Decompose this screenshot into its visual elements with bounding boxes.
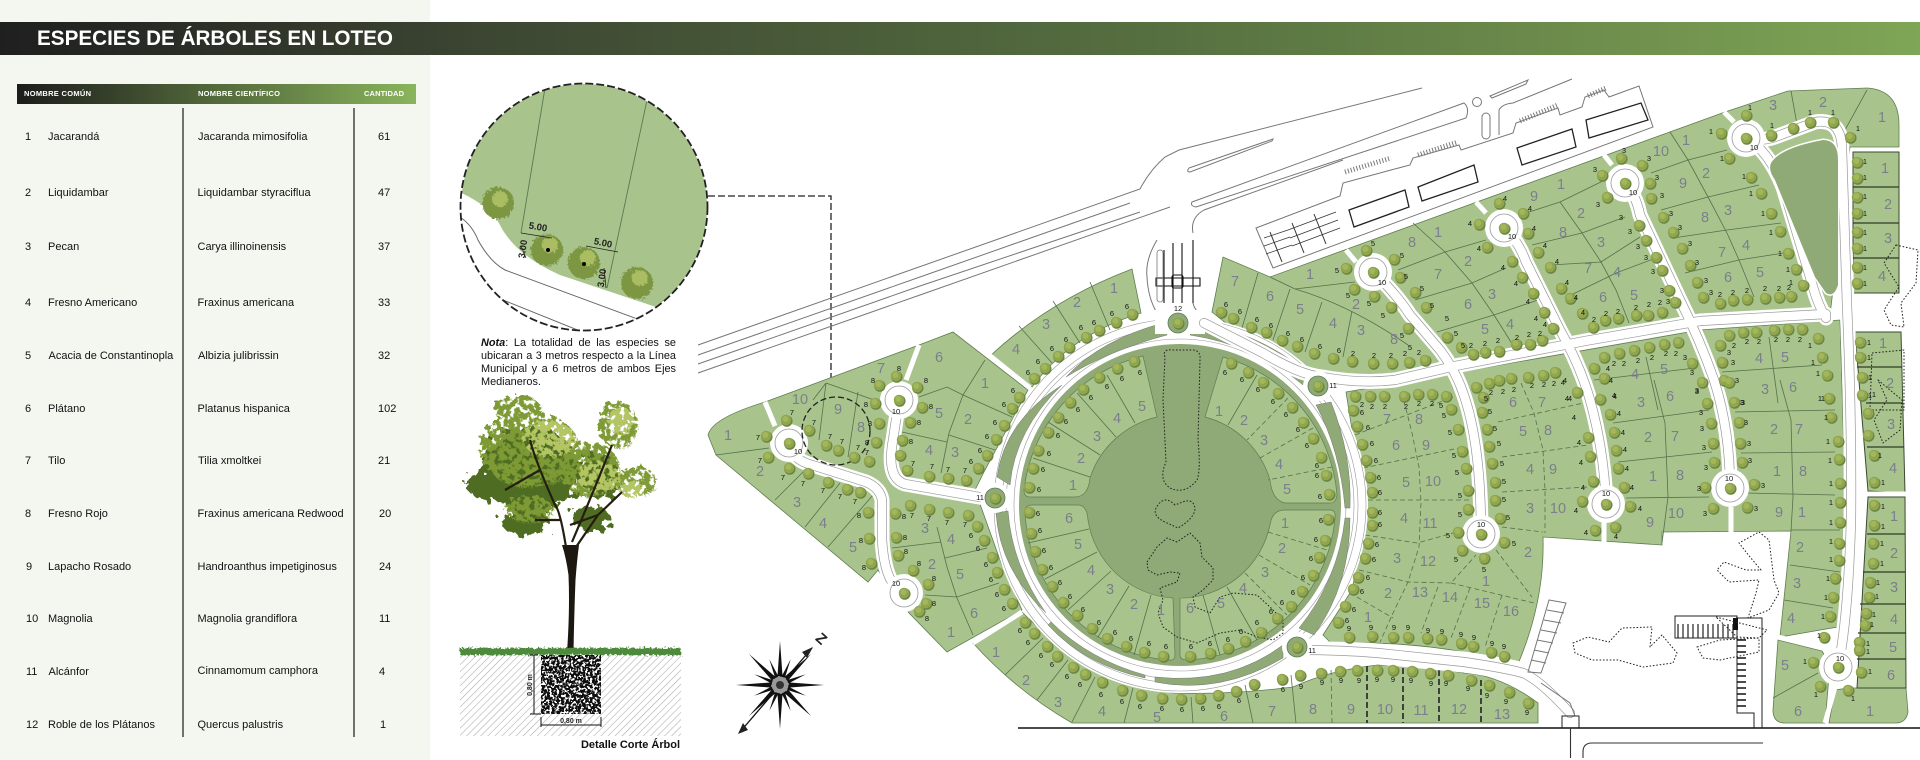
table rows: Fresno Rojo bbox=[48, 508, 108, 520]
table rows: 7 bbox=[25, 455, 31, 467]
table rows: Pecan bbox=[48, 241, 79, 253]
table rows: 9 bbox=[26, 561, 32, 573]
dimensions: 3.00 bbox=[517, 239, 530, 259]
table rows: Albizia julibrissin bbox=[198, 350, 279, 362]
caption: Detalle Corte Árbol bbox=[581, 738, 680, 751]
plan: tree species numbers bbox=[756, 103, 1885, 717]
table rows: 102 bbox=[378, 403, 396, 415]
plan: tree species numbers: 555555555555555555555555555555555 bbox=[1335, 239, 1516, 574]
plan: lot numbers: 43211234512345654321654321 bbox=[1012, 281, 1291, 619]
plan: lot numbers: 15 bbox=[1474, 596, 1490, 612]
plan: lot numbers: 12 bbox=[1451, 702, 1467, 718]
plan: tree species numbers: 111111111111111111111111111111111111111111111111111111111111 bbox=[1709, 103, 1885, 703]
table rows: 8 bbox=[25, 508, 31, 520]
plan: tree species numbers: 10 bbox=[1508, 232, 1516, 241]
plan: tree species numbers: 666666666666666666666666 bbox=[1036, 509, 1323, 651]
plan: tree species numbers: 10 bbox=[1629, 188, 1637, 197]
plan: tree species numbers: 10 bbox=[1378, 278, 1386, 287]
north-west arc lots bbox=[990, 269, 1141, 387]
plan: lot numbers: 786954321123456789 bbox=[1364, 395, 1557, 626]
table rows: 47 bbox=[378, 187, 390, 199]
table header: NOMBRE COMÚN bbox=[24, 89, 91, 98]
plan: tree species numbers: 777777777777777777777 bbox=[756, 408, 967, 529]
plan: lot numbers: 13 bbox=[1412, 585, 1428, 601]
table rows: 11 bbox=[379, 613, 390, 625]
plan: tree species numbers: 10 bbox=[892, 579, 900, 588]
soil section with planting pit: 0,80 m bbox=[560, 718, 582, 725]
south lots bbox=[973, 612, 1538, 723]
lower right lots bbox=[1773, 640, 1830, 723]
species table bbox=[17, 84, 416, 737]
tree canopy outlines bbox=[1147, 350, 1283, 643]
plan: tree species numbers: 10 bbox=[1750, 143, 1758, 152]
ring road lines and median islands bbox=[994, 319, 1366, 691]
table rows: 1 bbox=[380, 719, 386, 731]
dashed detail marker on plan bbox=[802, 397, 870, 465]
pit dimensions bbox=[530, 655, 601, 727]
plan: lot polygons bbox=[708, 88, 1908, 723]
plan: street trees bbox=[765, 114, 1875, 704]
table rows: Jacarandá bbox=[48, 131, 100, 143]
plan: tree species numbers: 10 bbox=[892, 407, 900, 416]
plan: tree species numbers: 10 bbox=[1477, 520, 1485, 529]
roundabouts bbox=[980, 308, 1333, 662]
plan: lot numbers: 16 bbox=[1503, 604, 1519, 620]
plan: tree species numbers: 11 bbox=[976, 493, 984, 502]
table rows: 20 bbox=[379, 508, 391, 520]
tree photo bbox=[466, 396, 657, 652]
entrance gate bbox=[1156, 240, 1200, 303]
plan: lot numbers: 10 bbox=[1425, 474, 1441, 490]
canopy bbox=[466, 428, 622, 535]
table rows: Magnolia grandiflora bbox=[198, 613, 298, 625]
soil section with planting pit: 0,80 m bbox=[527, 674, 534, 696]
table header: NOMBRE CIENTÍFICO bbox=[198, 89, 280, 98]
table rows: Liquidambar styraciflua bbox=[198, 187, 311, 199]
plan: tree species numbers: 12 bbox=[1174, 304, 1182, 313]
plan: lot numbers bbox=[724, 95, 1898, 726]
east strip lots bbox=[1853, 152, 1906, 688]
title bar bbox=[0, 22, 1920, 55]
plan: lot numbers: 12 bbox=[1420, 554, 1436, 570]
plan: lot numbers: 13 bbox=[1494, 707, 1510, 723]
table rows: Fresno Americano bbox=[48, 297, 137, 309]
plan: lot numbers: 14 bbox=[1442, 590, 1458, 606]
plan: lot numbers: 12345987654321324561 bbox=[724, 350, 989, 641]
plan: lot dividers bbox=[716, 90, 1906, 723]
dashed tree canopies south-east and east bbox=[1573, 245, 1918, 667]
table rows: Plátano bbox=[48, 403, 85, 415]
plan: tree species numbers: 333333333333333333333333333333333333333 bbox=[1593, 146, 1765, 518]
plan: lot numbers: 11 bbox=[1422, 516, 1438, 532]
plan: tree species numbers: 444444444444444444444444444444444444 bbox=[1468, 194, 1642, 541]
table rows: Platanus hispanica bbox=[198, 403, 291, 415]
plan: tree species numbers: 66666666666666 bbox=[1345, 408, 1382, 625]
table rows: 2 bbox=[25, 187, 31, 199]
plan: lot numbers: 45362718945362718 bbox=[1631, 350, 1807, 531]
dimensions: 5.00 bbox=[528, 220, 548, 235]
plan: lot numbers: 10 bbox=[792, 392, 808, 408]
plan: tree species numbers: 66666666666666666666666666666666 bbox=[1018, 300, 1341, 714]
table rows: 61 bbox=[378, 131, 390, 143]
plan: lot numbers: 1234123412345616543219 bbox=[1775, 161, 1898, 720]
dashed leader to plan bbox=[708, 196, 831, 397]
table rows: Fraxinus americana Redwood bbox=[198, 508, 344, 520]
table header: CANTIDAD bbox=[364, 89, 405, 98]
middle blocks bbox=[1323, 320, 1849, 664]
icon: compass rose bbox=[736, 630, 830, 734]
plan: tree species numbers: 22222222222222222222222222222222222222222222222 bbox=[1351, 283, 1802, 411]
north letter: Z bbox=[812, 630, 830, 649]
central green circle bbox=[1088, 416, 1270, 598]
table rows: Tilo bbox=[48, 455, 65, 467]
table rows: 5 bbox=[25, 350, 31, 362]
table rows: 33 bbox=[378, 297, 390, 309]
plan: lot numbers: 123456789 bbox=[992, 645, 1355, 726]
table rows: Carya illinoinensis bbox=[198, 241, 287, 253]
table rows: Quercus palustris bbox=[198, 719, 284, 731]
dimensions: 3.00 bbox=[596, 268, 609, 288]
table header bbox=[17, 84, 416, 104]
plan: tree species numbers: 10 bbox=[1836, 654, 1844, 663]
north-east block bbox=[1212, 88, 1899, 380]
plan: tree species numbers: 11 bbox=[1308, 646, 1316, 655]
inner ring lots bbox=[1024, 356, 1337, 660]
table rows: Acacia de Constantinopla bbox=[48, 350, 174, 362]
table rows: Tilia xmoltkei bbox=[198, 455, 261, 467]
plan: lot numbers: 7654312887651234987612345 bbox=[1231, 177, 1638, 348]
plan: lot numbers: 11 bbox=[1413, 703, 1429, 719]
detail circle: tree spacing bbox=[460, 82, 708, 332]
plan: tree species numbers: 10 bbox=[1725, 474, 1733, 483]
table rows: 4 bbox=[25, 297, 31, 309]
plan: lot numbers: 10 bbox=[1668, 506, 1684, 522]
icon: trees in detail bbox=[482, 187, 653, 299]
title bar: ESPECIES DE ÁRBOLES EN LOTEO bbox=[37, 27, 393, 50]
cul-de-sacs bbox=[770, 119, 1857, 686]
table rows: Liquidambar bbox=[48, 187, 109, 199]
planting pit bbox=[541, 655, 601, 714]
pond bbox=[1770, 140, 1838, 294]
south-east parking, buildings and boundary bbox=[1018, 600, 1920, 758]
plan: tree species numbers: 10 bbox=[794, 447, 802, 456]
table rows: 11 bbox=[26, 666, 37, 678]
table rows: 12 bbox=[26, 719, 38, 731]
left panel background bbox=[0, 0, 430, 760]
grass bbox=[460, 648, 681, 655]
plan: tree species numbers: 8888888888888888888 bbox=[857, 364, 936, 623]
plan: internal roads bbox=[765, 112, 1906, 723]
table rows: 24 bbox=[379, 561, 391, 573]
dimensions bbox=[517, 220, 618, 288]
dimensions: 5.00 bbox=[593, 236, 613, 251]
white ring of the roundabout road bbox=[992, 317, 1368, 693]
NW access lanes and parking bbox=[698, 79, 1653, 373]
soil section with planting pit bbox=[460, 648, 681, 736]
branches and trunk bbox=[562, 545, 579, 652]
table rows: Magnolia bbox=[48, 613, 94, 625]
plan: tree species numbers: 10 bbox=[1602, 489, 1610, 498]
table rows: Handroanthus impetiginosus bbox=[198, 561, 337, 573]
table rows: Alcánfor bbox=[48, 666, 89, 678]
table rows: Lapacho Rosado bbox=[48, 561, 131, 573]
table rows: 1 bbox=[25, 131, 31, 143]
plan: lot numbers: 10 bbox=[1653, 144, 1669, 160]
table rows: Jacaranda mimosifolia bbox=[198, 131, 308, 143]
table rows: 4 bbox=[379, 666, 385, 678]
plan: lot numbers: 10 bbox=[1550, 501, 1566, 517]
table rows: 3 bbox=[25, 241, 31, 253]
table rows: 10 bbox=[26, 613, 38, 625]
table rows: 21 bbox=[378, 455, 390, 467]
table rows: Roble de los Plátanos bbox=[48, 719, 156, 731]
nota: Nota: La totalidad de las especies se ubicaran a 3 metros respecto a la Línea Municipal y a 6 metros de ambos Ejes Medianeros. bbox=[481, 337, 676, 388]
plan: tree species numbers: 11 bbox=[1329, 381, 1337, 390]
plan: tree species numbers: 66666666666666666666666666666666 bbox=[969, 368, 1322, 613]
plan: lot numbers: 987612345321 bbox=[1679, 95, 1886, 286]
west block bbox=[708, 332, 1028, 652]
central park oval bbox=[1019, 344, 1341, 666]
table rows: 32 bbox=[378, 350, 390, 362]
table rows: Cinnamomum camphora bbox=[198, 665, 319, 677]
table rows bbox=[25, 131, 396, 731]
plan: lot numbers: 10 bbox=[1377, 702, 1393, 718]
table rows: 6 bbox=[25, 403, 31, 415]
plan: tree species numbers: 99999999999999999999999 bbox=[1299, 623, 1529, 717]
table rows: Fraxinus americana bbox=[198, 297, 295, 309]
table rows: 37 bbox=[378, 241, 390, 253]
